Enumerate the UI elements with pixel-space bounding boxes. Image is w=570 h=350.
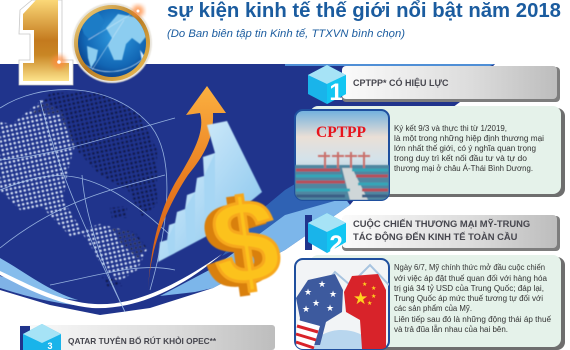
image: US and China fists [295,259,389,349]
header bar 1: CPTPP* CÓ HIỆU LỰC [353,77,449,88]
text block 2: và trả đũa lẫn nhau của hai bên. [394,325,508,334]
arrow: orange growth [148,86,226,290]
globe icon [72,3,152,83]
section 2 [295,213,565,350]
text block 2: Ngày 6/7, Mỹ chính thức mở đầu cuộc chiến [394,263,545,272]
icon: cube 1: 1 [329,79,343,106]
icon: dollar sign: $ [204,173,287,313]
large number 10 [19,0,152,85]
text block 2 [394,263,552,334]
header bar 2: CUỘC CHIẾN THƯƠNG MẠI MỸ-TRUNG [353,218,530,229]
fist: China: ★ [371,285,376,292]
world map dots [0,92,157,287]
chart: rising bars [158,121,262,262]
globe grid lines [0,90,175,312]
text block 2: trị giá 34 tỷ USD của Trung Quốc; đáp lại, [394,284,544,293]
fist: China: ★ [367,300,372,307]
numeral 1 [19,0,73,85]
fist: USA: ★ [312,298,320,308]
text block 1 [394,124,544,173]
fist: China: ★ [371,293,376,300]
white header band [0,0,570,63]
panel 2 [295,255,565,350]
header bar 3: QATAR TUYÊN BỐ RÚT KHỎI OPEC** [68,335,217,346]
fist: China [344,274,386,349]
icon: cube 2: 2 [329,231,343,258]
text block 1: Ký kết 9/3 và thực thi từ 1/2019, [394,124,507,133]
text block 2: với việc áp đặt thuế quan đối với hàng hóa [394,274,548,283]
header bar 2 [342,215,560,251]
panel 1 [295,106,565,200]
text block 2: các sản phẩm của Mỹ. [394,304,472,313]
photo: CPTPP port: CPTPP [316,124,366,141]
fist: USA: ★ [304,287,312,297]
fist: USA: ★ [329,289,337,299]
section 1 [295,65,565,200]
fist: China: ★ [362,281,367,288]
fist: USA: ★ [326,303,334,313]
text block 1: là một trong những hiệp định thương mại [394,134,544,143]
header bar 2: TÁC ĐỘNG ĐẾN KINH TẾ TOÀN CẦU [353,231,518,242]
subtitle: (Do Ban biên tập tin Kinh tế, TTXVN bình chọn) [167,28,405,40]
fist: USA [296,274,343,349]
photo: CPTPP port [295,110,389,200]
text block 2: Trung Quốc áp mức thuế tương tự đối với [394,294,543,303]
icon: dollar sign: $ [196,176,280,316]
fist: China: ★ [353,289,368,308]
fist: USA: ★ [302,304,310,314]
text block 2: Liên tiếp sau đó là những động thái áp thuế [394,315,552,324]
background: blue wave with world map [0,64,495,316]
icon: cube 1 [308,65,346,106]
text block 1: trong duy trì kết nối đầu tư và tự do [394,154,528,163]
text block 1: thương mại ở châu Á-Thái Bình Dương. [394,164,533,173]
fist: USA: ★ [318,279,326,289]
icon: cube 2 [305,213,346,258]
header bar 3 [20,325,275,350]
icon: cube 3 [20,324,61,350]
text block 1: lớn nhất thế giới, có ý nghĩa quan trọng [394,144,536,153]
header bar 1 [342,66,560,102]
section 3 [20,324,275,350]
